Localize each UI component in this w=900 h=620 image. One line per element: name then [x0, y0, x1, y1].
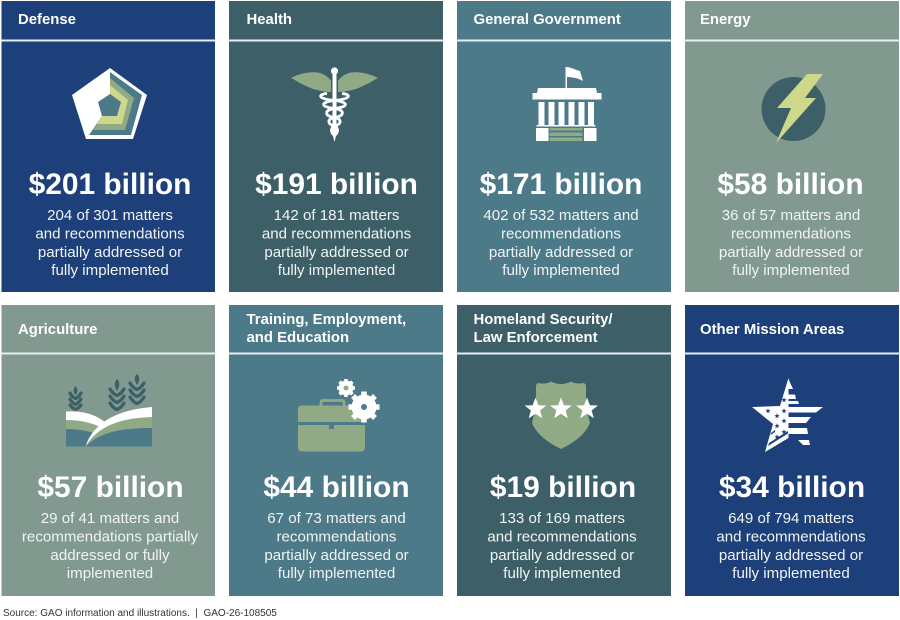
description: partially addressed or: [38, 244, 182, 261]
description: fully implemented: [278, 262, 395, 279]
description: 67 of 73 matters and: [267, 510, 406, 527]
panel: Health: [229, 1, 443, 292]
description: 402 of 532 matters and: [483, 207, 639, 224]
heading: Health: Health: [246, 12, 292, 28]
description: 36 of 57 matters and: [722, 207, 860, 224]
description: partially addressed or: [490, 547, 634, 564]
description: recommendations: [731, 226, 851, 242]
value: $19 billion: [490, 471, 636, 504]
panel: Energy: [685, 1, 899, 292]
description: 204 of 301 matters: [47, 207, 173, 224]
description: partially addressed or: [719, 244, 863, 261]
heading: Training, Employment, and Education: and Education: [246, 330, 349, 346]
heading: Energy: Energy: [700, 12, 751, 28]
heading: Homeland Security/Law Enforcement: Law Enforcement: [474, 330, 598, 346]
heading: General Government: General Government: [474, 12, 621, 28]
value: $201 billion: [29, 168, 191, 201]
value: $191 billion: [255, 168, 418, 201]
description: recommendations: [501, 226, 621, 242]
icon: government building: [532, 67, 602, 141]
description: fully implemented: [51, 262, 169, 279]
heading: Other Mission Areas: Other Mission Areas: [700, 322, 844, 338]
description: 142 of 181 matters: [274, 207, 399, 224]
description: partially addressed or: [264, 547, 409, 564]
icon: caduceus: [291, 67, 378, 142]
description: recommendations: [277, 528, 396, 546]
icon: pentagon radar: [72, 68, 147, 139]
heading: Homeland Security/Law Enforcement: Homeland Security/: [474, 312, 613, 328]
description: partially addressed or: [264, 244, 409, 261]
panel: Other Mission Areas: [685, 305, 899, 596]
description: and recommendations: [487, 528, 637, 546]
icon: badge with stars: [525, 382, 598, 449]
icon: briefcase and gears: [298, 379, 380, 452]
heading: Training, Employment, and Education: Training, Employment,: [246, 312, 406, 328]
heading: Defense: Defense: [18, 12, 76, 28]
value: $57 billion: [37, 471, 184, 504]
description: fully implemented: [503, 565, 621, 582]
description: fully implemented: [502, 262, 620, 279]
description: and recommendations: [262, 226, 411, 242]
panel: Agriculture: [2, 305, 215, 596]
icon: lightning bolt: [762, 74, 826, 143]
value: $58 billion: [717, 168, 864, 201]
description: partially addressed or: [489, 244, 633, 261]
description: partially addressed or: [719, 547, 863, 564]
description: addressed or fully: [50, 547, 170, 564]
value: $34 billion: [719, 471, 865, 504]
source note: Source: GAO information and illustrations. | GAO-26-108505: [3, 608, 277, 619]
description: 29 of 41 matters and: [41, 510, 179, 527]
panel: Training, Employment, and Education: [229, 305, 443, 596]
description: fully implemented: [278, 565, 395, 582]
description: 133 of 169 matters: [499, 510, 625, 527]
value: $171 billion: [480, 168, 642, 201]
panel: General Government: [457, 1, 671, 292]
description: 649 of 794 matters: [728, 510, 854, 527]
description: and recommendations: [35, 226, 185, 242]
panel: Homeland Security/Law Enforcement: [457, 305, 671, 596]
value: $44 billion: [263, 471, 410, 504]
panel: Defense: [2, 1, 215, 292]
description: recommendations partially: [22, 528, 199, 546]
heading: Agriculture: Agriculture: [18, 322, 97, 338]
description: fully implemented: [732, 565, 850, 582]
icon: wheat fields: [66, 374, 152, 446]
description: and recommendations: [716, 528, 866, 546]
description: implemented: [67, 565, 153, 582]
icon: flag star: [752, 378, 823, 452]
description: fully implemented: [732, 262, 850, 279]
